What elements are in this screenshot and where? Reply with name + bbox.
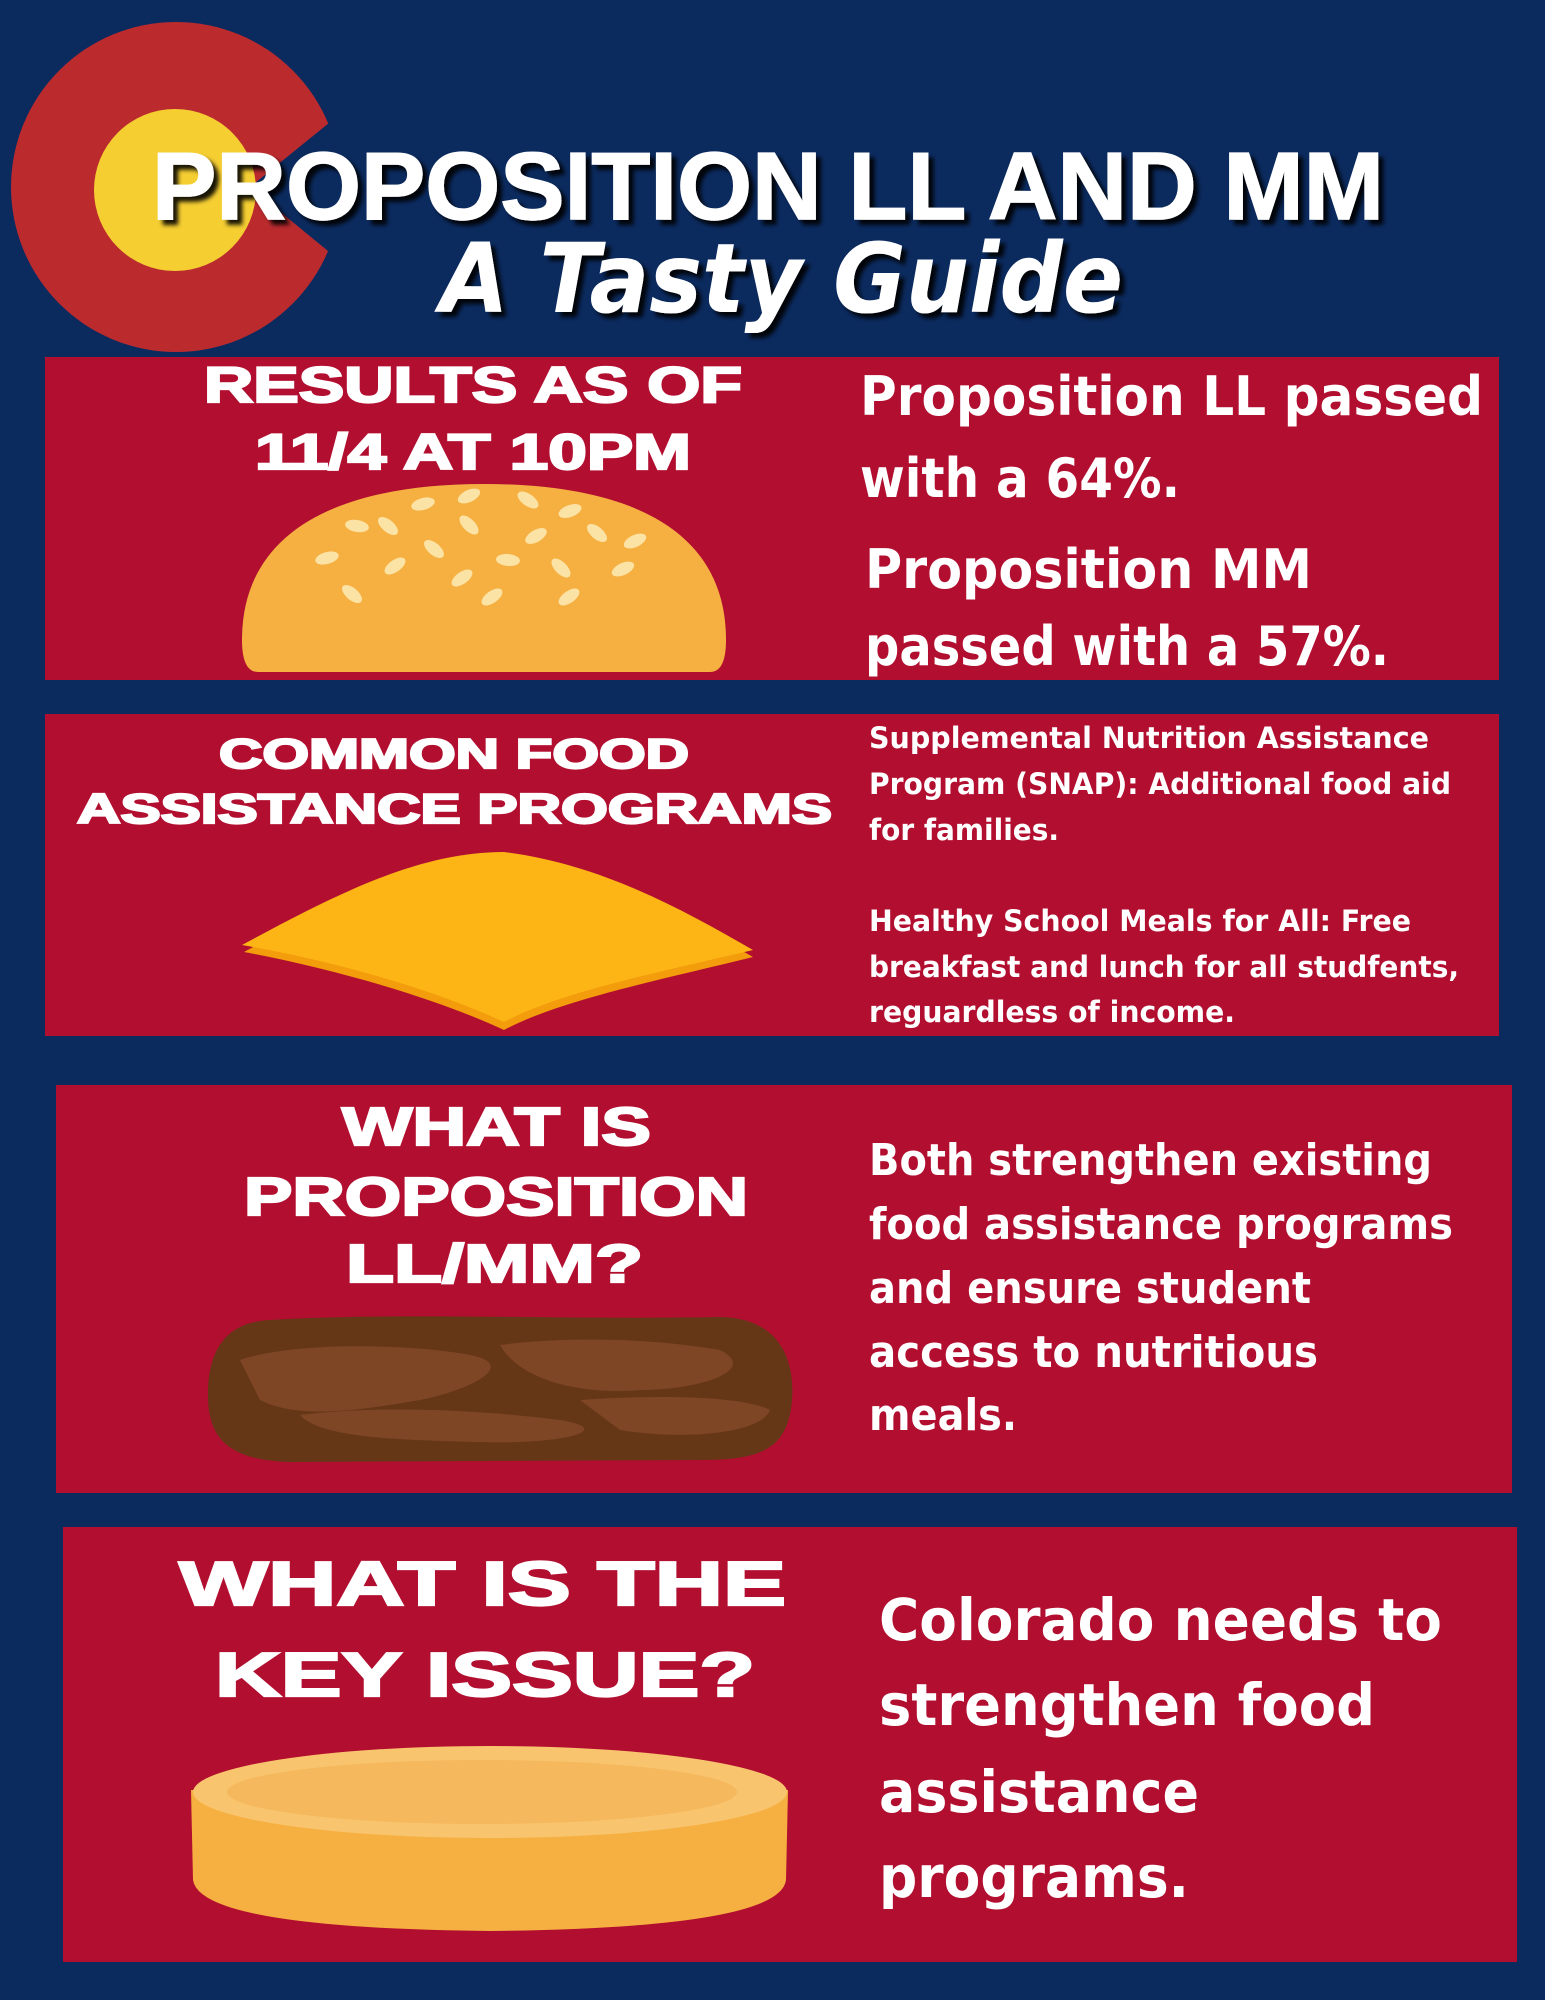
heading: what is: PROPOSITION [244, 1167, 748, 1227]
heading: key issue: WHAT IS THE [179, 1550, 786, 1619]
icon: patty [208, 1316, 792, 1462]
text: key issue: strengthen food [879, 1671, 1375, 1739]
text: key issue: programs. [879, 1843, 1189, 1911]
text: programs: breakfast and lunch for all studfents, [869, 950, 1459, 984]
text: results [860, 365, 1483, 678]
heading: programs [77, 730, 832, 832]
icon: top bun [242, 484, 726, 672]
heading: programs: ASSISTANCE PROGRAMS [77, 785, 832, 832]
text: what is: meals. [869, 1390, 1017, 1441]
heading: what is [244, 1097, 748, 1294]
text: what is: access to nutritious [869, 1327, 1318, 1378]
heading: results: RESULTS AS OF [204, 357, 742, 413]
panel: common food assistance programs [45, 714, 1499, 1036]
title: A Tasty Guide [434, 223, 1123, 335]
text: results: passed with a 57%. [865, 615, 1389, 678]
heading: key issue [179, 1550, 786, 1710]
text: programs: for families. [869, 813, 1059, 847]
title: PROPOSITION LL AND MM [152, 133, 1384, 240]
text: programs: Supplemental Nutrition Assistance [869, 721, 1429, 755]
panel: key issue [63, 1527, 1517, 1962]
text: programs: Healthy School Meals for All: Free [869, 904, 1411, 938]
text: programs [869, 721, 1459, 1029]
text: programs: Program (SNAP): Additional food aid [869, 767, 1451, 801]
text: results: with a 64%. [860, 447, 1180, 510]
text: what is [869, 1135, 1453, 1441]
panel: what is proposition [56, 1085, 1512, 1493]
text: results: Proposition MM [865, 538, 1312, 601]
panel: results [45, 357, 1499, 680]
text: what is: food assistance programs [869, 1199, 1453, 1250]
text: results: Proposition LL passed [860, 365, 1483, 428]
heading: key issue: KEY ISSUE? [215, 1641, 755, 1710]
heading: results [204, 357, 742, 480]
text: key issue: assistance [879, 1758, 1199, 1826]
heading: results: 11/4 AT 10PM [255, 424, 691, 480]
text: what is: and ensure student [869, 1263, 1311, 1314]
text: what is: Both strengthen existing [869, 1135, 1432, 1186]
title [152, 133, 1384, 335]
heading: what is: LL/MM? [346, 1234, 643, 1294]
heading: programs: COMMON FOOD [219, 730, 689, 777]
heading: what is: WHAT IS [342, 1097, 651, 1157]
icon: cheese slice [242, 852, 753, 1030]
icon: Colorado C logo [11, 22, 345, 352]
text: programs: reguardless of income. [869, 995, 1235, 1029]
text: key issue [879, 1586, 1442, 1911]
text: key issue: Colorado needs to [879, 1586, 1442, 1654]
icon: bottom bun [191, 1746, 788, 1931]
